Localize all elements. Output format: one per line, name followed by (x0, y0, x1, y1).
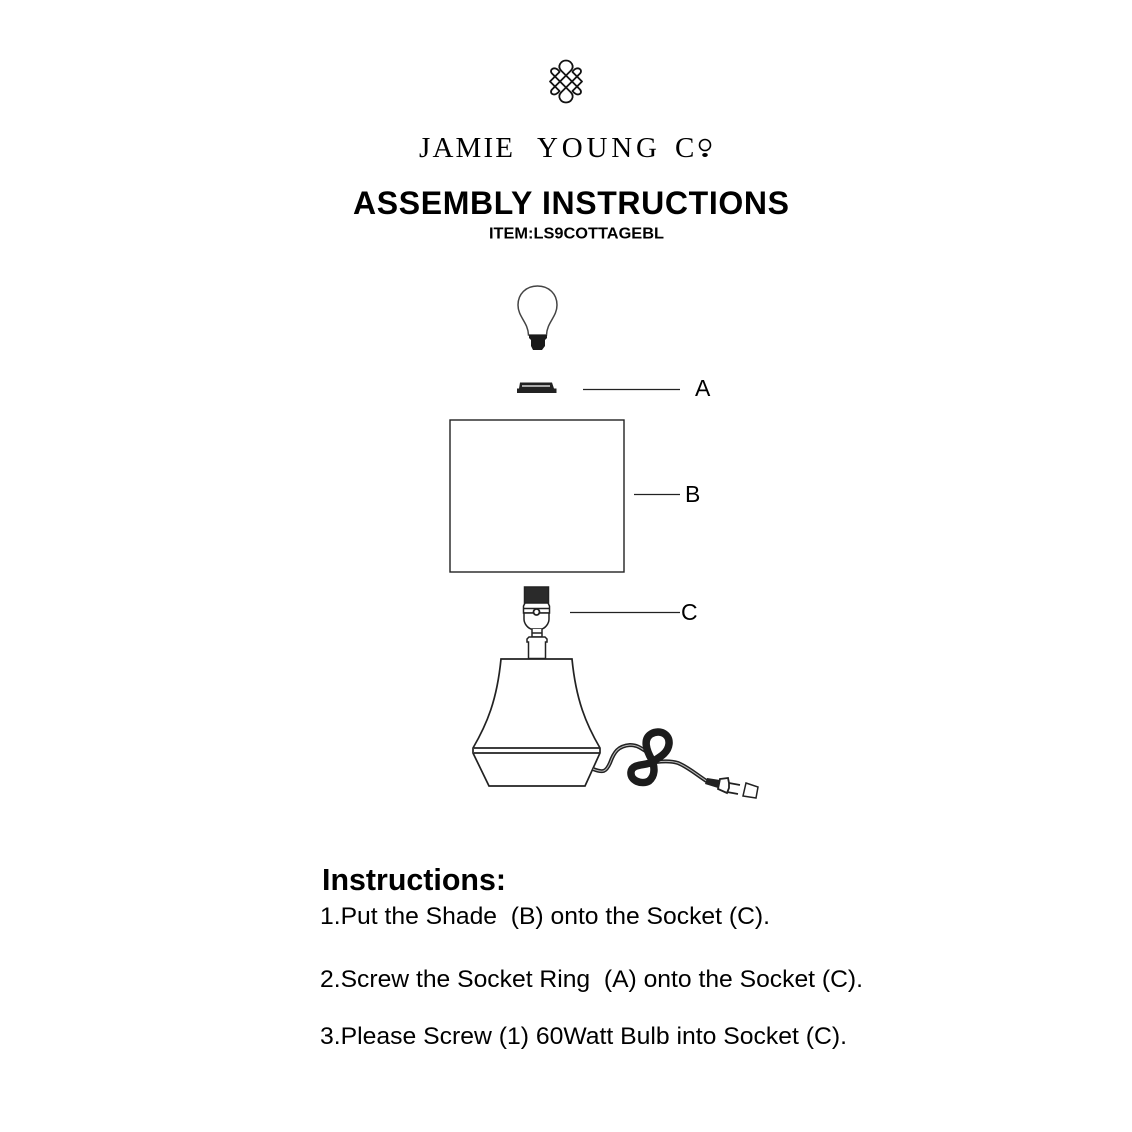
label C: C (681, 599, 698, 625)
instruction step 1: 1.Put the Shade (B) onto the Socket (C). (320, 903, 770, 930)
label A: A (695, 375, 711, 401)
power cord with plug (593, 732, 758, 798)
icon: light bulb (518, 286, 557, 350)
logo: wordmark (419, 132, 710, 164)
logo: wordmark: JAMIE (419, 132, 513, 164)
part A: socket ring (517, 382, 556, 393)
logo: wordmark: YOUNG (537, 132, 657, 164)
part B: lamp shade (450, 420, 624, 572)
instruction step 3: 3.Please Screw (1) 60Watt Bulb into Socket (C). (320, 1023, 847, 1050)
title: ASSEMBLY INSTRUCTIONS (353, 185, 789, 221)
logo: wordmark: C (675, 132, 694, 164)
label C (570, 599, 698, 625)
part C: socket (524, 587, 550, 658)
label B: B (685, 481, 700, 507)
item number: ITEM:LS9COTTAGEBL (489, 226, 664, 242)
lamp base (473, 659, 600, 786)
instructions heading: Instructions: (322, 862, 506, 897)
logo: knot icon (550, 60, 582, 102)
instruction step 2: 2.Screw the Socket Ring (A) onto the Socket (C). (320, 966, 863, 993)
label B (634, 481, 700, 507)
label A (583, 375, 711, 401)
